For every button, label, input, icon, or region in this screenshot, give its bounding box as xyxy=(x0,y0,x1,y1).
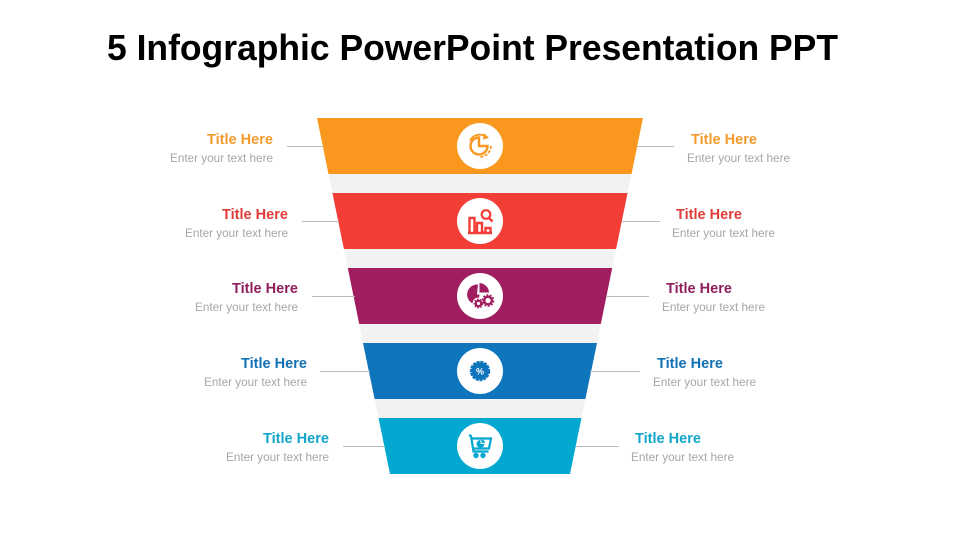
icon: shopping cart xyxy=(457,423,503,469)
left label 2: Title Here xyxy=(222,207,288,223)
right label 4 xyxy=(590,356,756,389)
left label 4 xyxy=(204,356,370,389)
left label 3: Title Here xyxy=(232,281,298,297)
right label 2: Title Here xyxy=(676,207,742,223)
right label 5: Title Here xyxy=(635,431,701,447)
right label 4: Enter your text here xyxy=(653,375,756,389)
left label 4: Enter your text here xyxy=(204,375,307,389)
left label 1: Title Here xyxy=(207,132,273,148)
left label 5: Enter your text here xyxy=(226,450,329,464)
left label 3: Enter your text here xyxy=(195,300,298,314)
right label 4: Title Here xyxy=(657,356,723,372)
right label 2 xyxy=(622,207,775,240)
funnel band 5 xyxy=(378,418,582,474)
right label 3 xyxy=(606,281,765,314)
icon: bar chart with magnifier xyxy=(457,198,503,244)
funnel band 2 xyxy=(332,193,628,249)
icon: refresh pie xyxy=(457,123,503,169)
right label 1: Enter your text here xyxy=(687,151,790,165)
right label 1: Title Here xyxy=(691,132,757,148)
left label 3 xyxy=(195,281,355,314)
left label 2: Enter your text here xyxy=(185,226,288,240)
funnel xyxy=(317,118,643,474)
right label 3: Title Here xyxy=(666,281,732,297)
funnel band 1 xyxy=(317,118,643,174)
right label 5: Enter your text here xyxy=(631,450,734,464)
left label 1 xyxy=(170,132,324,165)
left label 5: Title Here xyxy=(263,431,329,447)
funnel band 3 xyxy=(348,268,612,324)
left label 4: Title Here xyxy=(241,356,307,372)
right label 2: Enter your text here xyxy=(672,226,775,240)
funnel gaps xyxy=(328,174,632,418)
left label 5 xyxy=(226,431,385,464)
right label 3: Enter your text here xyxy=(662,300,765,314)
left label 2 xyxy=(185,207,339,240)
left label 1: Enter your text here xyxy=(170,151,273,165)
right label 1 xyxy=(637,132,790,165)
title: 5 Infographic PowerPoint Presentation PPT xyxy=(107,27,838,68)
icon: pie chart with gears xyxy=(457,273,503,319)
right label 5 xyxy=(576,431,734,464)
icon: percent badge: % xyxy=(476,366,484,376)
funnel band 4 xyxy=(363,343,597,399)
icon: percent badge xyxy=(457,348,503,394)
